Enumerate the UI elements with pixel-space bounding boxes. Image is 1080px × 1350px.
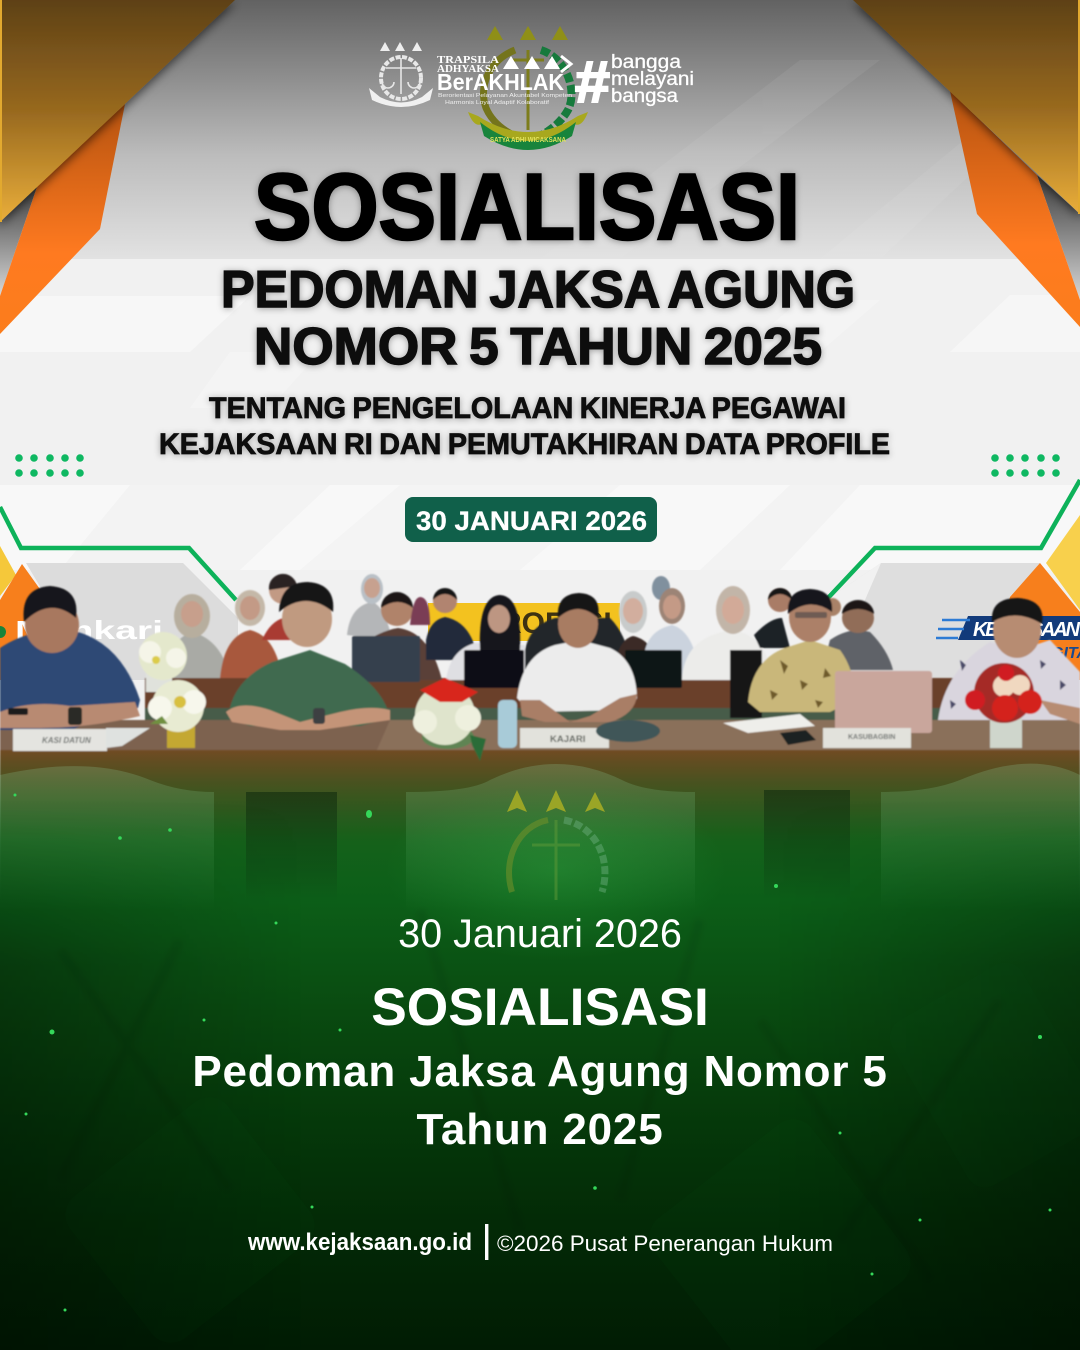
date badge: 30 JANUARI 2026 [416,506,647,536]
heading: Pedoman Jaksa Agung: NOMOR 5 TAHUN 2025 [254,318,822,376]
corner decoration: top right [853,0,1080,327]
date text: 30 Januari 2026 [398,912,682,956]
flowers: white back left [139,632,187,692]
name plate: Kajari: KAJARI [550,734,585,745]
flowers: white daisies in yellow vase [148,680,206,748]
wall panels and faint emblem [0,764,1080,960]
caption: Pedoman Jaksa Agung Nomor 5 Tahun 2025: Tahun 2025 [416,1105,664,1154]
person: left man in blue batik [0,586,140,730]
logo: BerAKHLAK: TRAPSILA [437,55,499,66]
backdrop banner: yellow [428,603,620,641]
person: man in green shirt [226,582,390,730]
title: SOSIALISASI: SOSIALISASI [254,154,800,259]
person: Kajari in white shirt [517,593,637,722]
logo: BerAKHLAK: BerAKHLAK [437,69,564,95]
side vignette [0,800,1080,1350]
caption: Pedoman Jaksa Agung Nomor 5 Tahun 2025: Pedoman Jaksa Agung Nomor 5 [192,1047,888,1096]
footer: website and copyright [247,1224,833,1260]
background: faint geometric texture [56,910,1080,1350]
main caption: SOSIALISASI: SOSIALISASI [371,978,709,1037]
name plate: Kasubagbin: KASUBAGBIN [848,734,895,741]
logo: BerAKHLAK: ADHYAKSA [437,64,499,75]
date badge [405,497,657,542]
logo: bangga melayani bangsa: melayani [611,69,694,90]
papers and phone [723,714,816,745]
logo: BerAKHLAK [437,55,572,106]
backdrop panel: left with Mimkari logo: Mimkari [15,615,163,645]
logo: gold and green prosecutor emblem [468,26,588,150]
subheading: Tentang Pengelolaan Kinerja: KEJAKSAAN RI DAN PEMUTAKHIRAN DATA PROFILE [159,428,890,461]
person: man in batik shirt [748,589,855,712]
backdrop panel: right with Kejaksaan Digital logo: KEJAKSAAN [973,619,1080,641]
flowers: red roses in glass vase [965,663,1042,748]
person: right man in floral shirt [938,598,1080,724]
logo: white prosecutor emblem [369,42,433,107]
dot grid: left [15,454,84,477]
lower green panel [0,900,1080,1350]
name plate: Kasi Datun: KASI DATUN [42,736,91,745]
background: light lower area [0,259,1080,899]
backdrop panel: right with Kejaksaan Digital logo [826,480,1080,690]
back row desk [145,678,1075,722]
logo: bangga melayani bangsa [574,50,694,115]
flowers: centre arrangement [413,678,486,761]
heading: Pedoman Jaksa Agung: PEDOMAN JAKSA AGUNG [221,261,855,319]
subheading: Tentang Pengelolaan Kinerja: TENTANG PENGELOLAAN KINERJA PEGAWAI [209,392,846,425]
logo: BerAKHLAK: Berorientasi Pelayanan Akuntabel Kompeten [438,93,572,99]
back row participants [165,574,893,680]
logo: gold and green prosecutor emblem: SATYA ADHI WICAKSANA [490,137,566,144]
corner decoration: top left [0,0,235,334]
footer: website and copyright: ©2026 Pusat Penerangan Hukum [497,1231,833,1256]
logo: bangga melayani bangsa: bangga [611,52,681,73]
name plate: Kasi Datun [13,728,150,751]
logo: bangga melayani bangsa: # [574,50,610,115]
background: subtle bands [0,60,1080,570]
pink laptop [835,671,932,733]
logo: BerAKHLAK: Harmonis Loyal Adaptif Kolaboratif [445,100,550,106]
conference speaker [596,720,660,742]
dot grid: right [991,454,1060,477]
photo: meeting table and participants [0,574,1080,900]
heading: Pedoman Jaksa Agung [221,261,855,376]
name plate: Kasubagbin [823,728,911,748]
lower fade from photo to green [0,752,1080,902]
back row laptops [352,636,762,718]
sparkles [14,794,1052,1312]
subheading: Tentang Pengelolaan Kinerja [159,392,890,461]
name plate: Kajari [520,728,609,748]
backdrop panel: left with Mimkari logo [0,507,238,680]
front table [0,720,1080,900]
footer: website and copyright: www.kejaksaan.go.id [247,1229,472,1256]
water bottle [498,700,517,748]
caption: Pedoman Jaksa Agung Nomor 5 Tahun 2025 [192,1047,888,1154]
logo: bangga melayani bangsa: bangsa [611,86,678,107]
backdrop banner: yellow: ROFESI [500,607,612,640]
background: grey gradient top [0,0,1080,259]
